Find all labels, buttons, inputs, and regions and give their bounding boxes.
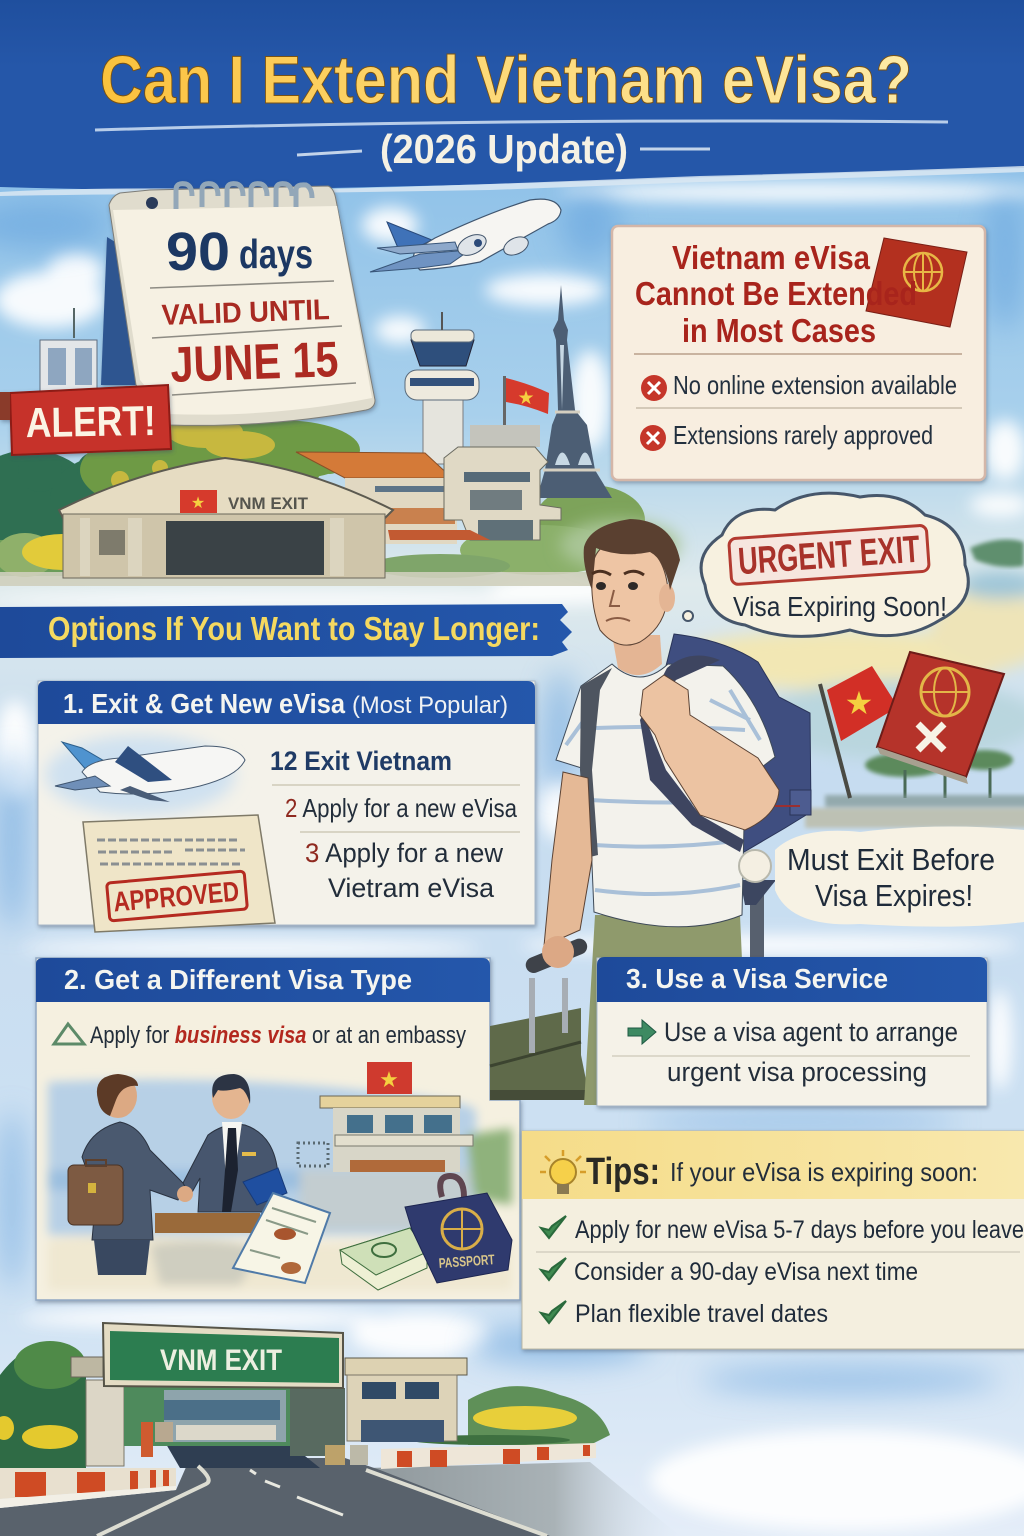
options banner: Options If You Want to Stay Longer: [48, 610, 540, 647]
icon: vietnam flag on pole: ★ [517, 388, 535, 409]
panel: tips: If your eVisa is expiring soon: [670, 1157, 978, 1187]
tip 2: Consider a 90-day eVisa next time [574, 1258, 918, 1286]
thought bubble: urgent exit [683, 493, 968, 636]
must exit callout: Visa Expires! [815, 878, 973, 913]
tip 3: Plan flexible travel dates [575, 1300, 828, 1328]
panel 2 text: Apply for business visa or at an embassy [90, 1022, 466, 1049]
man with tie [183, 1124, 280, 1212]
person with backpack [490, 519, 811, 1105]
urgent exit stamp [729, 525, 929, 585]
panel 1 heading: 1. Exit & Get New eVisa [63, 688, 345, 719]
icon: exit gate building [71, 1357, 467, 1466]
icon: money [340, 1228, 427, 1290]
icon: hangar VNM EXIT: VNM EXIT [228, 494, 309, 513]
calendar: days [239, 231, 313, 277]
arms [544, 772, 592, 946]
panel 3 text: Use a visa agent to arrange [664, 1017, 958, 1047]
sidewalk and road [366, 1462, 680, 1536]
icon: hangar VNM EXIT: ★ [191, 495, 205, 512]
calendar: VALID UNTIL [161, 294, 330, 332]
icon: blue passport: PASSPORT [438, 1251, 495, 1271]
icon: city building [40, 308, 97, 392]
icon: visa certificate [233, 1193, 330, 1283]
icon: blue passport [405, 1176, 512, 1283]
panel 1: exit and new evisa: (Most Popular) [352, 692, 508, 719]
calendar text: 90 [166, 222, 230, 282]
icon: control tower [405, 312, 479, 464]
options banner [0, 604, 572, 658]
calendar [101, 184, 375, 425]
pole behind [750, 870, 764, 960]
neck [612, 635, 662, 675]
icon: airplane flying [370, 199, 561, 272]
alert badge: ALERT! [25, 397, 156, 446]
suitcase [490, 936, 590, 1100]
panel: cannot be extended: Cannot Be Extended [635, 275, 917, 312]
item: no online extension: No online extension available [673, 370, 957, 400]
icon: lattice tower [537, 285, 612, 498]
calendar: JUNE 15 [169, 331, 339, 393]
icon: approved document [83, 815, 275, 932]
title: Can I Extend Vietnam eVisa? [100, 42, 912, 118]
panel: cannot be extended: in Most Cases [682, 312, 876, 349]
step list: 12 Exit Vietnam [270, 746, 452, 776]
panel 1: exit and new evisa: 2 Apply for a new eVisa [285, 793, 517, 823]
header band [0, 0, 1024, 196]
panel: cannot be extended [612, 226, 985, 480]
torso [556, 664, 775, 927]
head [592, 540, 668, 645]
icon: triangle [54, 1024, 84, 1044]
straps [580, 668, 612, 858]
icon: handshake businessmen [68, 1074, 287, 1275]
foliage [0, 1341, 610, 1470]
icon: red passport [866, 238, 967, 327]
panel 1: exit and new evisa: 3 Apply for a new [305, 838, 503, 868]
item: rarely approved: Extensions rarely approved [673, 420, 933, 450]
curb [0, 1468, 176, 1499]
desk [155, 1213, 260, 1233]
gate sign [103, 1323, 343, 1388]
road and bottom scene [0, 1323, 680, 1536]
panel: tips [522, 1131, 1024, 1349]
urgent exit stamp: URGENT EXIT [737, 529, 921, 583]
panel 1: exit and new evisa [38, 681, 535, 932]
icon: arrow [628, 1020, 656, 1044]
icon: terminal buildings [296, 425, 561, 544]
icon: vietnam flag on pole [503, 376, 549, 450]
icon: embassy building [298, 1062, 473, 1172]
panel 3 heading: 3. Use a Visa Service [626, 963, 888, 994]
panel heading: Vietnam eVisa [672, 239, 871, 276]
subtitle: (2026 Update) [380, 126, 628, 172]
legs [584, 915, 760, 1105]
icon: light bulb [540, 1150, 586, 1194]
panel 3: visa service [597, 957, 987, 1106]
gate sign: VNM EXIT [160, 1344, 282, 1377]
panel 1: exit and new evisa: Vietram eVisa [328, 873, 495, 903]
bubble text: Visa Expiring Soon! [733, 591, 947, 622]
must exit callout: Must Exit Before [787, 842, 995, 877]
panel 2 heading: 2. Get a Different Visa Type [64, 964, 412, 995]
scene: hills and trees [0, 416, 645, 586]
icon: approved document: APPROVED [112, 876, 240, 917]
alert badge [0, 385, 171, 455]
icon: flag with crossed passport: ★ [845, 685, 873, 721]
panel 3: visa service: urgent visa processing [667, 1057, 927, 1087]
face [596, 582, 606, 590]
tips heading: Tips: [586, 1151, 660, 1193]
icon: flag with crossed passport [820, 652, 1004, 798]
panel 2: different visa type [36, 958, 520, 1300]
icon: hangar VNM EXIT [59, 458, 393, 578]
man with briefcase [82, 1122, 185, 1240]
icon: airplane [55, 742, 245, 802]
calendar rings [176, 184, 312, 209]
icon: embassy building: ★ [379, 1067, 399, 1092]
backpack [650, 634, 811, 852]
scene: lake landscape behind bubble [560, 520, 1024, 828]
must exit callout [739, 826, 1024, 927]
scene wash [48, 1080, 512, 1290]
